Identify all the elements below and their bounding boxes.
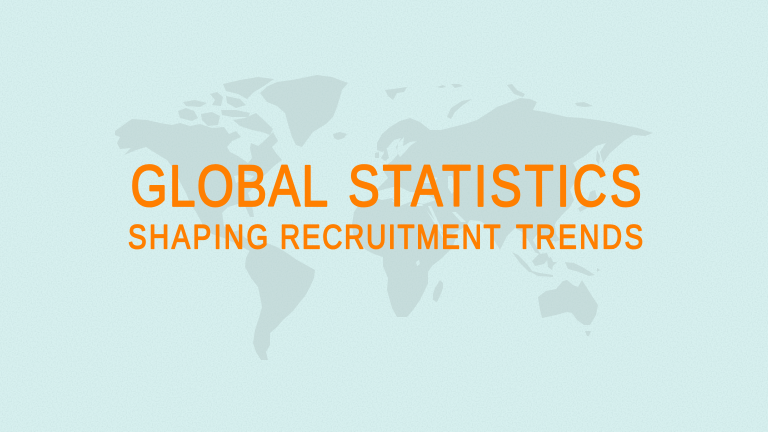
islands: British Isles [375,146,389,161]
island: Madagascar [433,280,443,302]
heading: main title: GLOBAL [130,155,328,219]
heading: main title: STATISTICS [348,155,642,219]
islands: Arctic Ocean [385,84,593,119]
continent: Australia [538,280,598,325]
sea: Persian Gulf [452,212,466,222]
heading: subtitle: RECRUITMENT [280,218,501,256]
sea: Caspian [448,176,456,194]
islands: Southeast Asia [512,226,600,277]
continent: North America [115,119,282,252]
heading: subtitle [128,218,643,256]
world map [115,75,653,360]
island: Greenland [260,75,348,147]
sea: Black Sea [420,176,438,183]
inland seas [234,137,466,266]
lake: African lakes [416,260,420,266]
sea: Red Sea [428,206,443,232]
island: Tasmania [585,331,591,336]
lake: Great Lakes [234,174,254,183]
heading: subtitle: SHAPING [128,218,268,256]
continent: Africa [352,197,456,317]
island: Iceland [333,132,347,140]
continent: South America [245,243,315,360]
continent: Eurasia [372,98,653,255]
heading: main title [130,155,642,219]
islands: Canadian Arctic [178,77,274,135]
sea: Mediterranean [375,186,436,206]
islands: Japan and Sakhalin [578,150,606,212]
heading: subtitle: TRENDS [516,218,643,256]
sea: Baltic [397,137,417,157]
